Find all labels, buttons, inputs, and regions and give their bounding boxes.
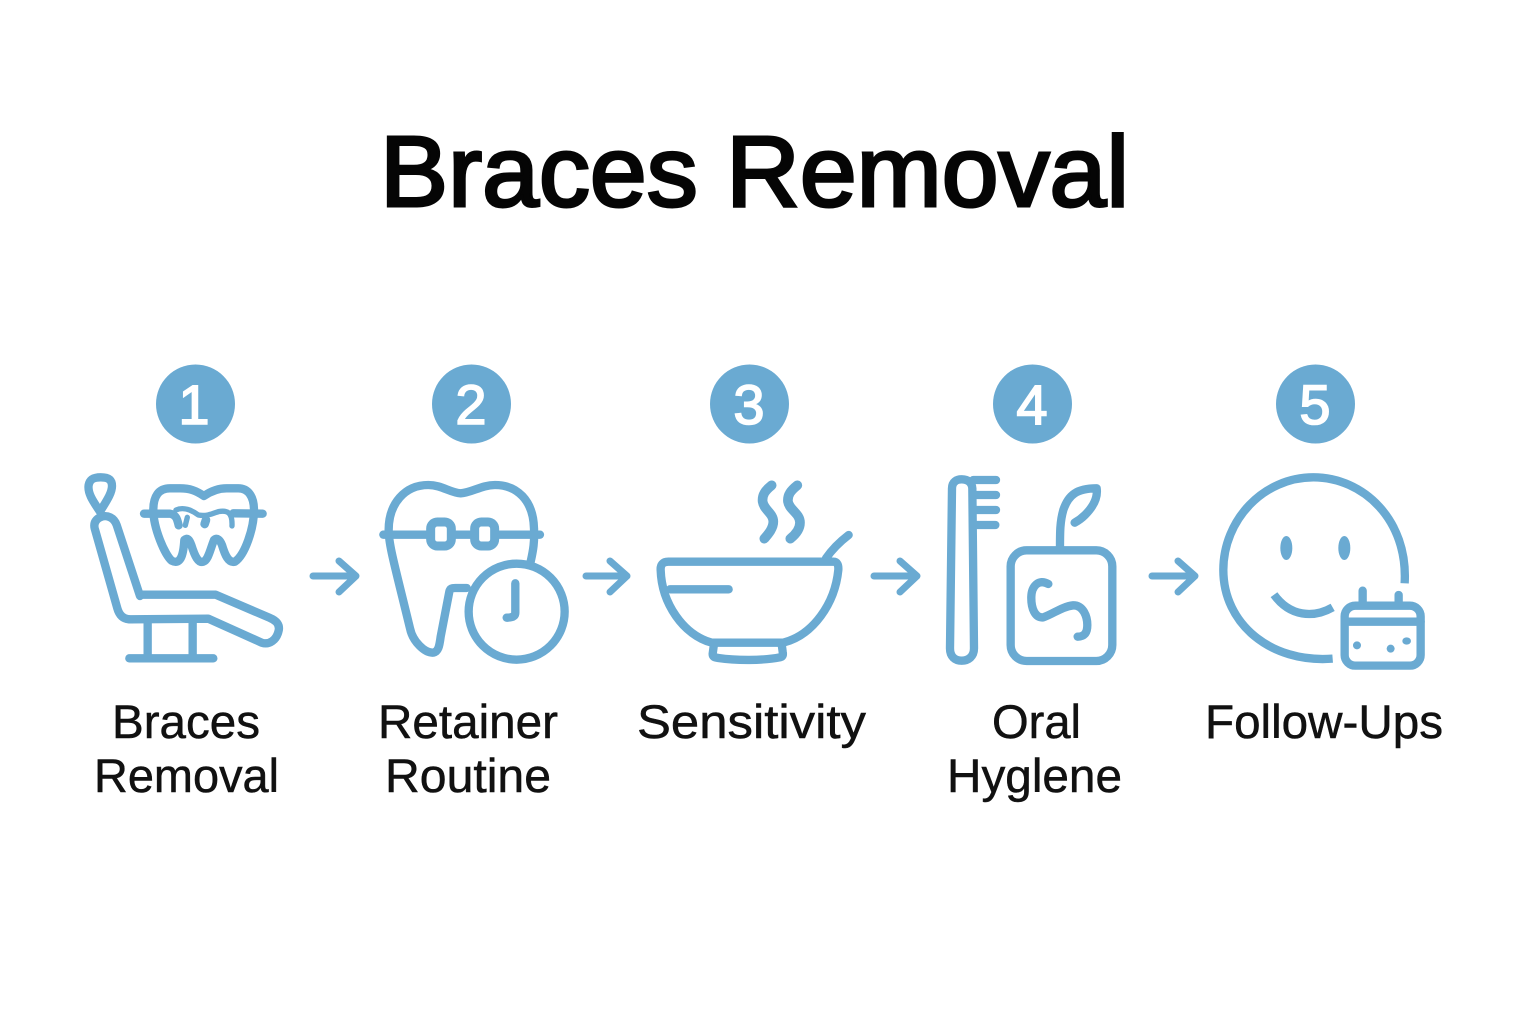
- label: Oral Hyglene: Hyglene: [947, 749, 1122, 802]
- step 1 number badge: 1: [178, 373, 210, 436]
- step 5 number badge: [1276, 364, 1355, 444]
- step 4 number badge: [993, 364, 1072, 444]
- icon: tooth with braces and clock: [383, 485, 565, 660]
- arrow 4 to 5: [1152, 561, 1195, 592]
- icon: toothbrush and floss: [950, 479, 1112, 661]
- label: Braces Removal: Removal: [94, 749, 279, 802]
- step 3 number badge: 3: [733, 373, 765, 436]
- label: Retainer Routine: Retainer: [378, 695, 558, 748]
- arrow 1 to 2: [313, 561, 356, 592]
- step 5 number badge: 5: [1299, 373, 1331, 436]
- step 2 number badge: 2: [455, 373, 487, 436]
- label: Braces Removal: Braces: [112, 695, 260, 748]
- label: Sensitivity: Sensitivity: [637, 695, 867, 748]
- label: Follow-Ups: Follow-Ups: [1205, 695, 1443, 748]
- arrow 2 to 3: [586, 561, 627, 592]
- step 1 number badge: [156, 364, 235, 444]
- step 3 number badge: [710, 364, 789, 444]
- icon: bowl with steam and spoon: [661, 485, 849, 660]
- step 2 number badge: [432, 364, 511, 444]
- icon: dental chair with braces tooth: [88, 477, 279, 658]
- label: Oral Hyglene: Oral: [992, 695, 1081, 748]
- label: Retainer Routine: Routine: [385, 749, 551, 802]
- icon: smiley face with calendar: [1223, 477, 1421, 666]
- step 4 number badge: 4: [1016, 373, 1048, 436]
- arrow 3 to 4: [874, 561, 917, 592]
- title: Braces Removal: [380, 116, 1129, 228]
